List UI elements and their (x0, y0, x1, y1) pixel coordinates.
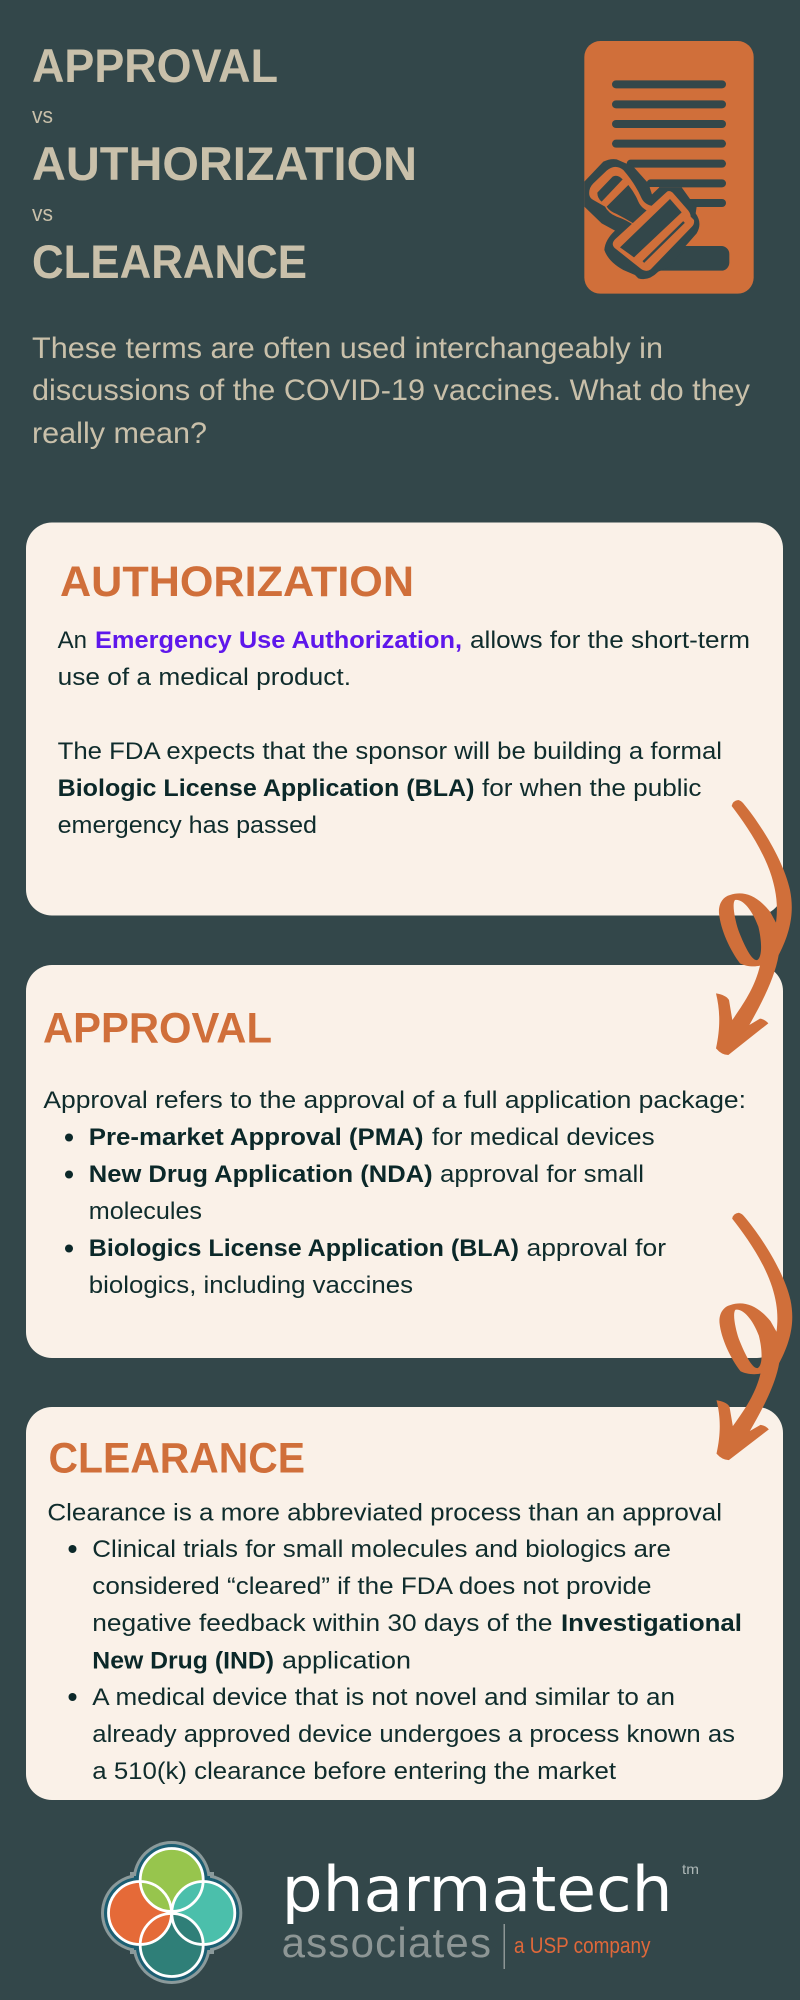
wordmark (282, 1853, 699, 1969)
list: clearance details: New Drug (IND) (92, 1648, 274, 1675)
title: APPROVAL (32, 39, 278, 92)
list: clearance details: considered “cleared” if the FDA does not provide (92, 1573, 652, 1600)
text block: authorization body: allows for the short-term (470, 627, 750, 654)
heading: authorization: AUTHORIZATION (60, 558, 414, 606)
heading: clearance: CLEARANCE (48, 1435, 305, 1483)
text block: authorization body: An (58, 627, 87, 654)
heading: approval: APPROVAL (43, 1005, 272, 1053)
icon: four overlapping circles (101, 1841, 242, 1984)
list: clearance details: Clinical trials for small molecules and biologics are (92, 1536, 671, 1563)
list: approval types: approval for small (440, 1161, 644, 1188)
list: approval types: biologics, including vaccines (89, 1272, 413, 1299)
list: clearance details: Investigational (561, 1610, 742, 1637)
intro text: really mean? (32, 417, 207, 450)
list: approval types: molecules (89, 1198, 202, 1225)
text block: authorization body (58, 627, 750, 839)
text block: authorization body: The FDA expects that the sponsor will be building a formal (58, 738, 722, 765)
list: clearance details: already approved device undergoes a process known as (92, 1721, 735, 1748)
text block: approval intro: Approval refers to the approval of a full application package: (43, 1087, 746, 1114)
intro text: discussions of the COVID-19 vaccines. What do they (32, 374, 750, 407)
list: clearance details: A medical device that is not novel and similar to an (92, 1684, 675, 1711)
icon: document with stamp (584, 41, 754, 294)
wordmark: pharmatech (282, 1853, 673, 1926)
text block: authorization body: Biologic License Application (BLA) (58, 775, 474, 802)
list: approval types: approval for (526, 1235, 666, 1262)
title (32, 39, 417, 288)
wordmark: associates (282, 1919, 491, 1966)
panel: clearance (26, 1407, 783, 1800)
list: approval types: New Drug Application (NDA) (89, 1161, 433, 1188)
panel: approval (26, 965, 783, 1358)
intro text: These terms are often used interchangeably in (32, 332, 663, 365)
list: approval types: Pre-market Approval (PMA) (89, 1124, 424, 1151)
text block: authorization body: emergency has passed (58, 812, 317, 839)
logo: pharmatech associates (101, 1841, 699, 1984)
wordmark: a USP company (514, 1933, 650, 1958)
list: clearance details: a 510(k) clearance before entering the market (92, 1758, 616, 1785)
title: CLEARANCE (32, 235, 307, 288)
list: clearance details (68, 1536, 742, 1785)
panel: authorization (26, 522, 783, 916)
title: AUTHORIZATION (32, 137, 417, 190)
text block: clearance intro: Clearance is a more abbreviated process than an approval (47, 1500, 722, 1526)
stamp handle (589, 167, 653, 226)
list: approval types (65, 1124, 666, 1299)
text block: authorization body: for when the public (482, 775, 702, 802)
text block: authorization body: Emergency Use Authorization, (95, 627, 462, 654)
intro text (32, 332, 750, 450)
text block: authorization body: use of a medical product. (58, 664, 351, 691)
list: clearance details: negative feedback within 30 days of the (92, 1610, 553, 1637)
title: vs (32, 201, 53, 226)
arrow: approval to clearance (716, 1213, 792, 1460)
list: approval types: for medical devices (432, 1124, 655, 1151)
wordmark: tm (682, 1861, 699, 1877)
list: approval types: Biologics License Application (BLA) (89, 1235, 519, 1262)
list: clearance details: application (282, 1648, 411, 1675)
title: vs (32, 103, 53, 128)
arrow: authorization to approval (716, 800, 792, 1055)
stamp plate (613, 191, 694, 271)
